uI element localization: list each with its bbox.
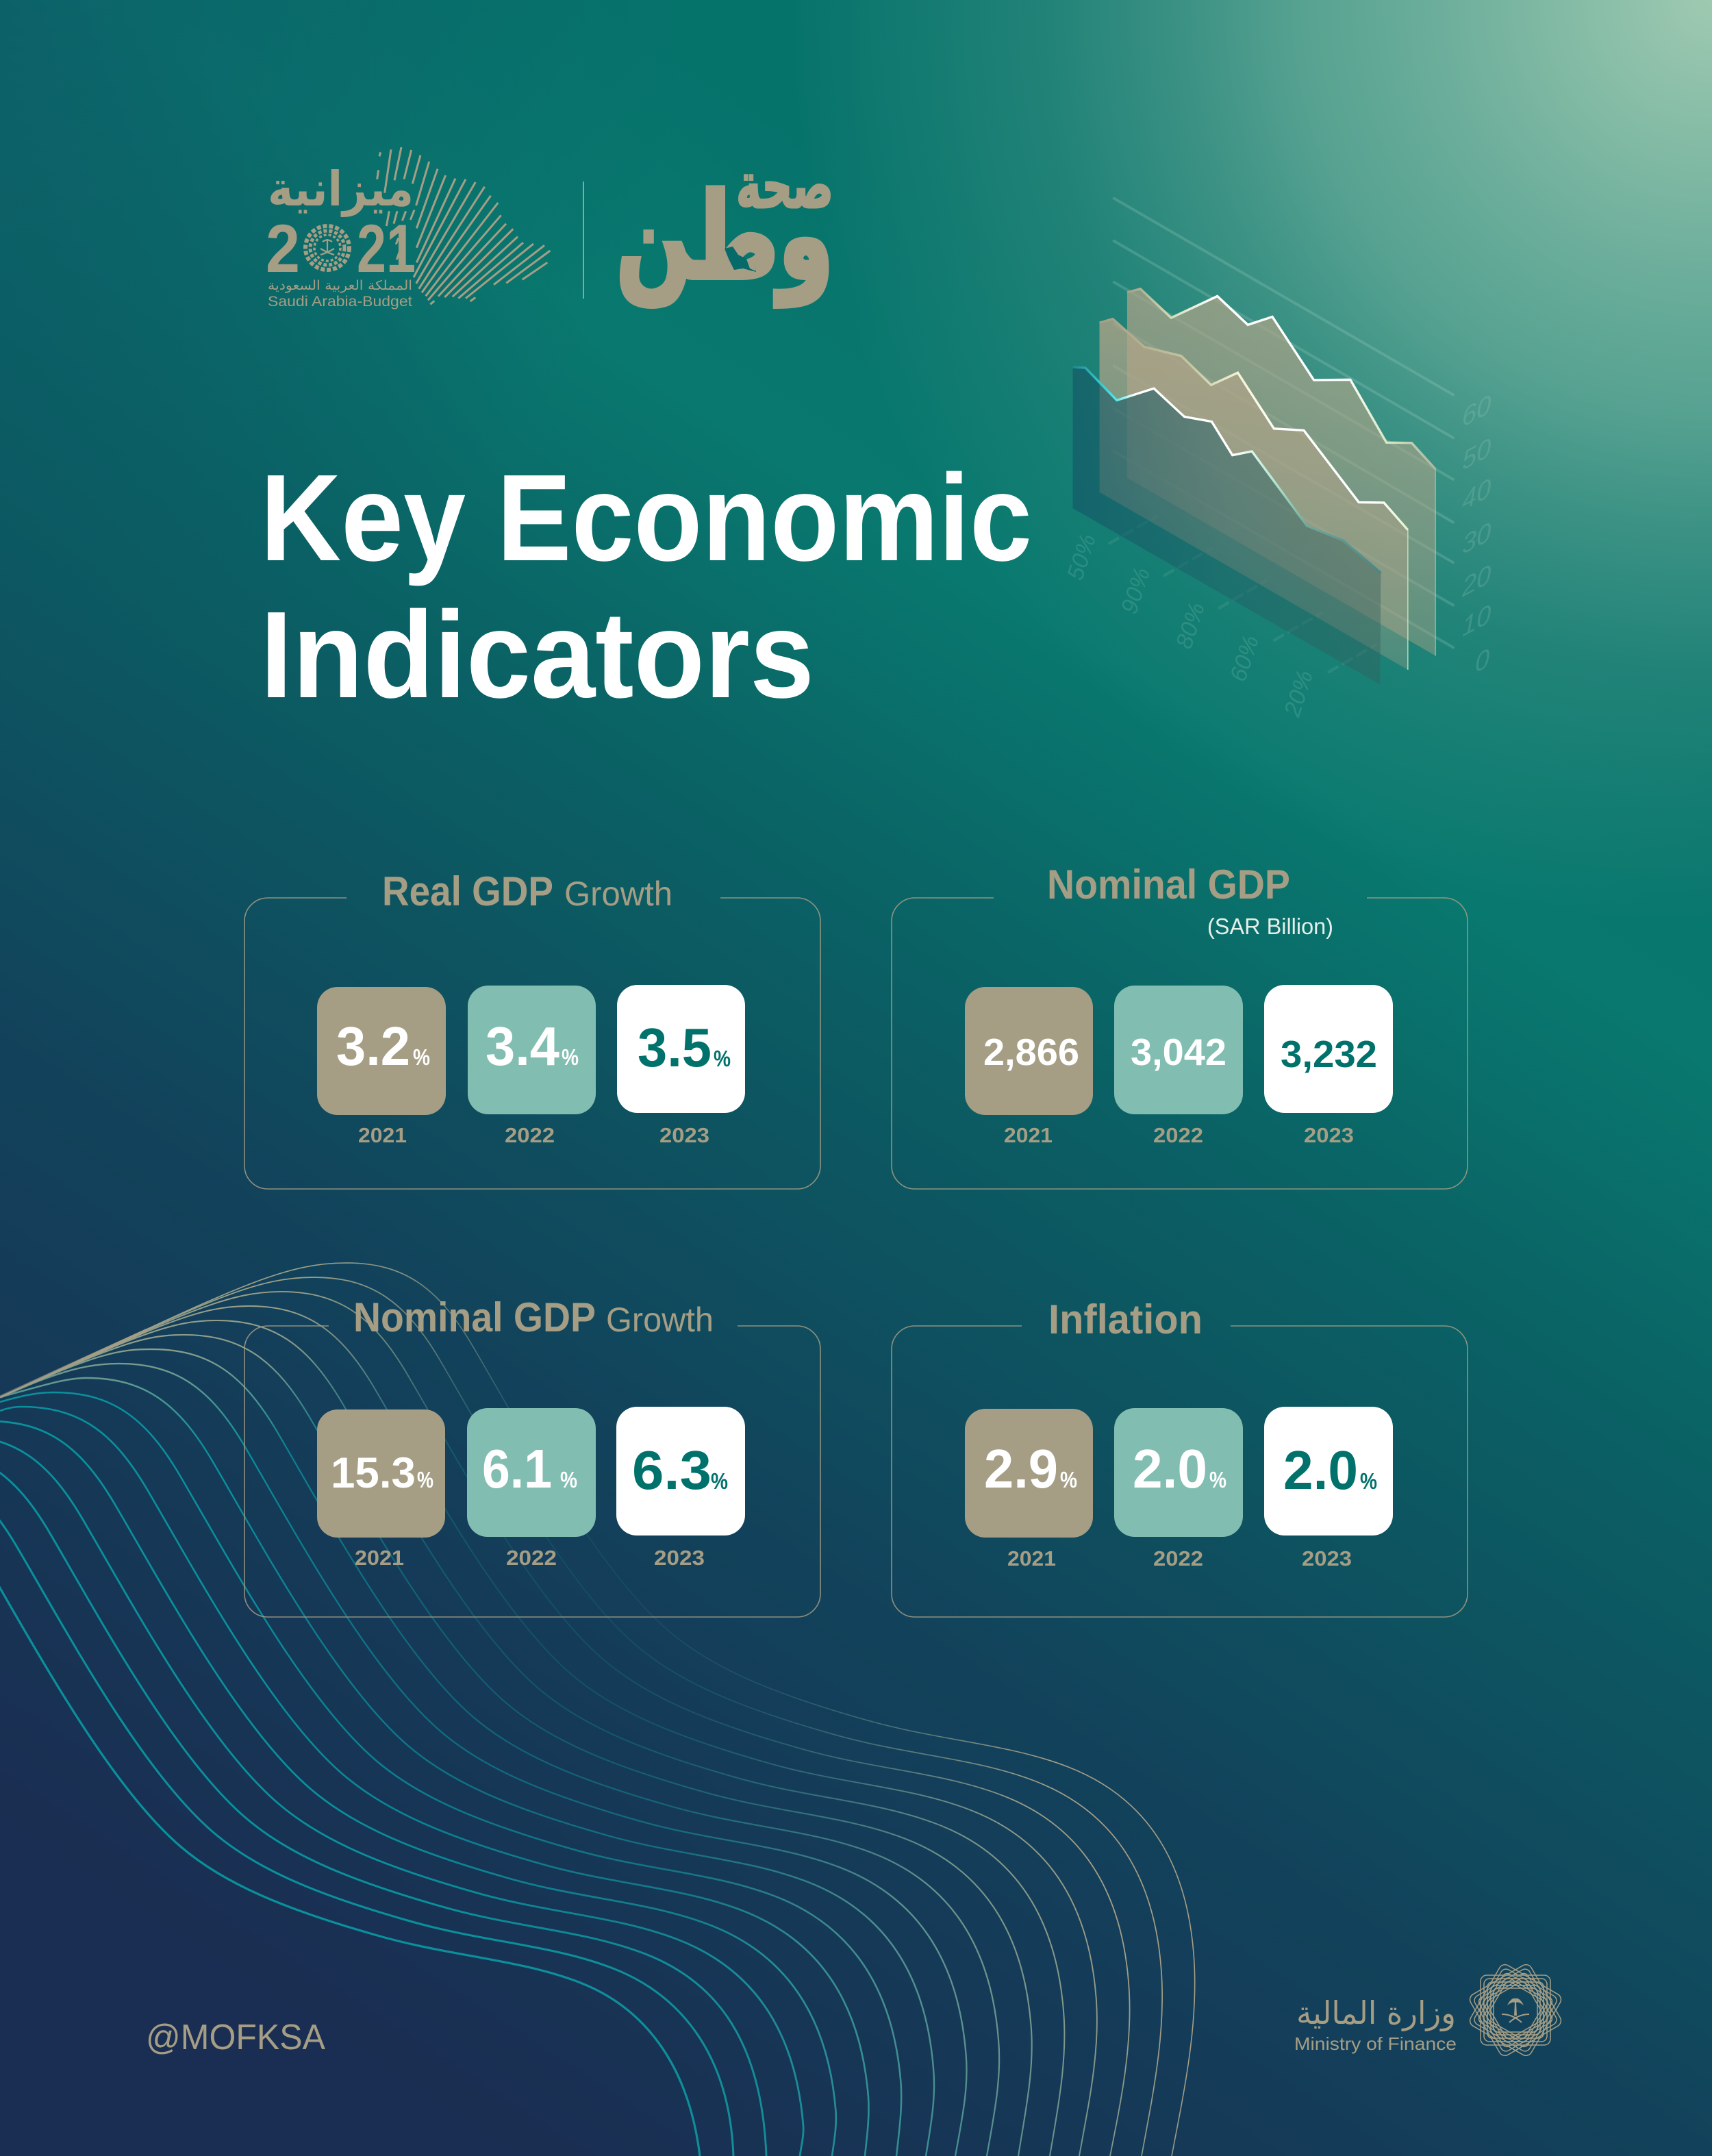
panel heading: Real GDP <box>382 868 553 914</box>
panel heading: Nominal GDP <box>353 1294 596 1340</box>
panel heading: Growth <box>606 1301 714 1339</box>
tile 2021: % <box>1060 1467 1077 1492</box>
tile 2023: % <box>1360 1468 1377 1494</box>
title line 2: Indicators <box>260 586 814 724</box>
panel frame <box>892 1326 1468 1617</box>
tile 2021 <box>317 1409 445 1570</box>
rosette rings <box>1468 1962 1563 2058</box>
tile 2021: 2021 <box>355 1546 404 1570</box>
tile 2023 <box>616 1407 745 1570</box>
English ministry name: Ministry of Finance <box>1294 2033 1457 2054</box>
y axis labels: 20 <box>1461 558 1491 603</box>
tile 2022: 3,042 <box>1131 1031 1226 1073</box>
tile 2022: % <box>560 1467 577 1492</box>
tile 2021: 2021 <box>1004 1123 1053 1147</box>
panel frame <box>244 898 820 1189</box>
decorative wave lines <box>0 1263 1195 2156</box>
tile 2023: 2.0 <box>1283 1440 1358 1501</box>
tile 2022: 6.1 <box>482 1438 552 1499</box>
tile 2021 <box>965 1409 1093 1570</box>
tile 2022 <box>1114 986 1243 1147</box>
tile 2021: % <box>413 1044 430 1070</box>
tile 2023: 2023 <box>659 1123 709 1147</box>
tile 2021: 2,866 <box>983 1031 1079 1073</box>
tile 2022 <box>467 1408 596 1570</box>
tile 2022: 3.4 <box>486 1016 559 1077</box>
logo divider <box>583 181 584 299</box>
Saudi Arabia-Budget: Saudi Arabia-Budget <box>268 294 412 310</box>
panel heading: Inflation <box>1048 1296 1203 1342</box>
y axis labels: 30 <box>1462 516 1491 560</box>
y axis labels: 50 <box>1462 431 1491 476</box>
panel heading: Growth <box>564 875 672 913</box>
tile 2022 <box>1114 1408 1243 1570</box>
x axis labels: 20% <box>1279 667 1318 720</box>
y axis labels: 60 <box>1462 388 1491 433</box>
floor dashes <box>1109 516 1376 672</box>
tile 2023: % <box>711 1468 728 1494</box>
Arabic word: budget: ميزانية <box>268 161 414 217</box>
tile 2023: % <box>714 1046 731 1071</box>
x axis labels: 90% <box>1116 564 1155 617</box>
tile 2022: % <box>562 1044 579 1070</box>
y axis labels <box>1461 388 1491 679</box>
icon: striped map of Saudi Arabia <box>377 147 550 304</box>
tile 2021: 2021 <box>1007 1546 1056 1570</box>
Arabic ministry name: وزارة المالية <box>1296 1994 1456 2032</box>
panel heading: Nominal GDP <box>1047 862 1290 907</box>
isometric area chart <box>1062 199 1491 720</box>
chart grid lines <box>1114 199 1453 647</box>
panel: Nominal GDP <box>892 862 1468 1189</box>
x axis labels: 60% <box>1225 632 1264 685</box>
tile 2021: 2.9 <box>984 1438 1058 1499</box>
middle area series <box>1100 319 1408 670</box>
logo: Sehat Watan <box>616 149 833 307</box>
icon: Saudi map cut-out <box>725 247 756 272</box>
palm and swords <box>1502 1998 1529 2022</box>
tile 2023: 6.3 <box>632 1440 712 1501</box>
tile 2021: % <box>417 1467 433 1492</box>
y axis labels: 10 <box>1462 598 1491 642</box>
tile 2023 <box>1264 985 1393 1147</box>
logo: Ministry of Finance <box>1294 1962 1563 2058</box>
tile 2021: 2021 <box>358 1123 407 1147</box>
tile 2023: 2023 <box>654 1546 705 1570</box>
year digit 2: 2 <box>266 210 300 286</box>
icon: rosette emblem <box>1468 1962 1563 2058</box>
panel frame <box>892 898 1468 1189</box>
social handle: @MOFKSA <box>146 2018 325 2057</box>
tile 2022: 2022 <box>1153 1546 1203 1570</box>
tile 2023 <box>1264 1407 1393 1570</box>
front area series <box>1073 367 1381 685</box>
tile 2023: 2023 <box>1302 1546 1352 1570</box>
Arabic line: Kingdom of Saudi Arabia: المملكة العربية السعودية <box>268 278 412 293</box>
year digits 21: 21 <box>357 210 416 286</box>
x axis labels: 80% <box>1171 599 1210 652</box>
icon: star emblem <box>305 226 349 270</box>
logo: Saudi Arabia Budget 2021 <box>266 147 550 310</box>
title line 1: Key Economic <box>260 449 1032 587</box>
tile 2021: 3.2 <box>336 1016 410 1077</box>
panel frame <box>244 1326 820 1617</box>
y axis labels: 0 <box>1475 642 1490 679</box>
tile 2022: 2.0 <box>1133 1438 1207 1499</box>
panel: Real GDP Growth <box>244 868 820 1189</box>
Arabic word: health: صحة <box>736 149 833 223</box>
panel unit: (SAR Billion) <box>1207 914 1333 939</box>
tile 2023: 3.5 <box>638 1017 712 1078</box>
tile 2023: 2023 <box>1304 1123 1354 1147</box>
title <box>260 449 1032 724</box>
Arabic word: nation: وطن <box>616 168 833 307</box>
tile 2022: % <box>1209 1467 1226 1492</box>
tile 2023: 3,232 <box>1281 1033 1377 1075</box>
tile 2021 <box>965 987 1093 1147</box>
tile 2022: 2022 <box>506 1546 557 1570</box>
tile 2021: 15.3 <box>331 1449 416 1497</box>
tile 2022: 2022 <box>505 1123 555 1147</box>
tile 2023 <box>617 985 745 1147</box>
panel: Inflation <box>892 1296 1468 1617</box>
tile 2022: 2022 <box>1153 1123 1203 1147</box>
x axis labels: 50% <box>1062 531 1101 584</box>
tile 2021 <box>317 987 446 1147</box>
back area series <box>1127 289 1435 655</box>
tile 2022 <box>468 986 596 1147</box>
panel: Nominal GDP Growth <box>244 1294 820 1617</box>
x axis labels <box>1062 531 1318 720</box>
y axis labels: 40 <box>1462 472 1491 516</box>
